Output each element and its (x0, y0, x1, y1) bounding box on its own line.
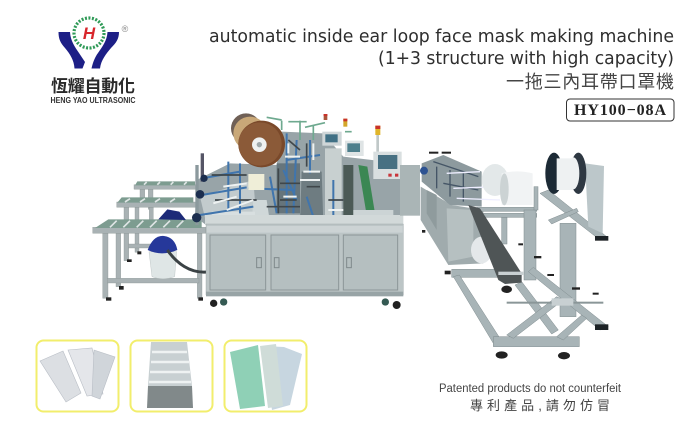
cabinet base (205, 215, 403, 296)
paper rolls (231, 113, 285, 167)
patent notice Chinese: 專利產品,請勿仿冒 (470, 398, 610, 413)
model number badge (566, 99, 674, 121)
icon: blue hands (58, 32, 119, 68)
company logo (50, 18, 136, 105)
masks (147, 342, 193, 408)
logo Chinese name: 恆耀自動化 (51, 76, 135, 96)
product photo: green masks (224, 340, 306, 412)
product photo: stacked masks (130, 340, 212, 412)
blue valves (192, 175, 208, 222)
masks (40, 348, 115, 402)
vacuum bucket (148, 209, 235, 279)
patent notice English: Patented products do not counterfeit (439, 383, 622, 395)
masks (230, 344, 302, 410)
title: 一拖三內耳帶口罩機 (506, 72, 674, 92)
back panel connecting machines (400, 165, 420, 216)
registered mark: ® (122, 24, 129, 34)
white material rolls (471, 164, 533, 263)
title: (1+3 structure with high capacity) (378, 49, 674, 69)
dark fabric belt (468, 205, 522, 284)
roller and guide bar (498, 272, 603, 306)
ear loop reel (545, 153, 608, 330)
machine: feeding unit (400, 152, 608, 359)
control panels and signal lights (322, 114, 402, 179)
title (209, 27, 674, 92)
cabinet casters (210, 298, 401, 309)
frame feet and knobs (496, 243, 599, 359)
title: automatic inside ear loop face mask making machine (209, 27, 674, 47)
product photo: white masks (36, 340, 118, 412)
model number badge: HY100−08A (574, 102, 666, 119)
body of feeding unit (400, 152, 500, 274)
machine: main unit (93, 113, 420, 309)
mechanism tangle (195, 117, 400, 225)
icon: gear with H: H (83, 24, 96, 43)
conveyor racks (93, 185, 206, 298)
logo English name: HENG YAO ULTRASONIC (50, 96, 136, 105)
aluminium frame (452, 187, 608, 347)
